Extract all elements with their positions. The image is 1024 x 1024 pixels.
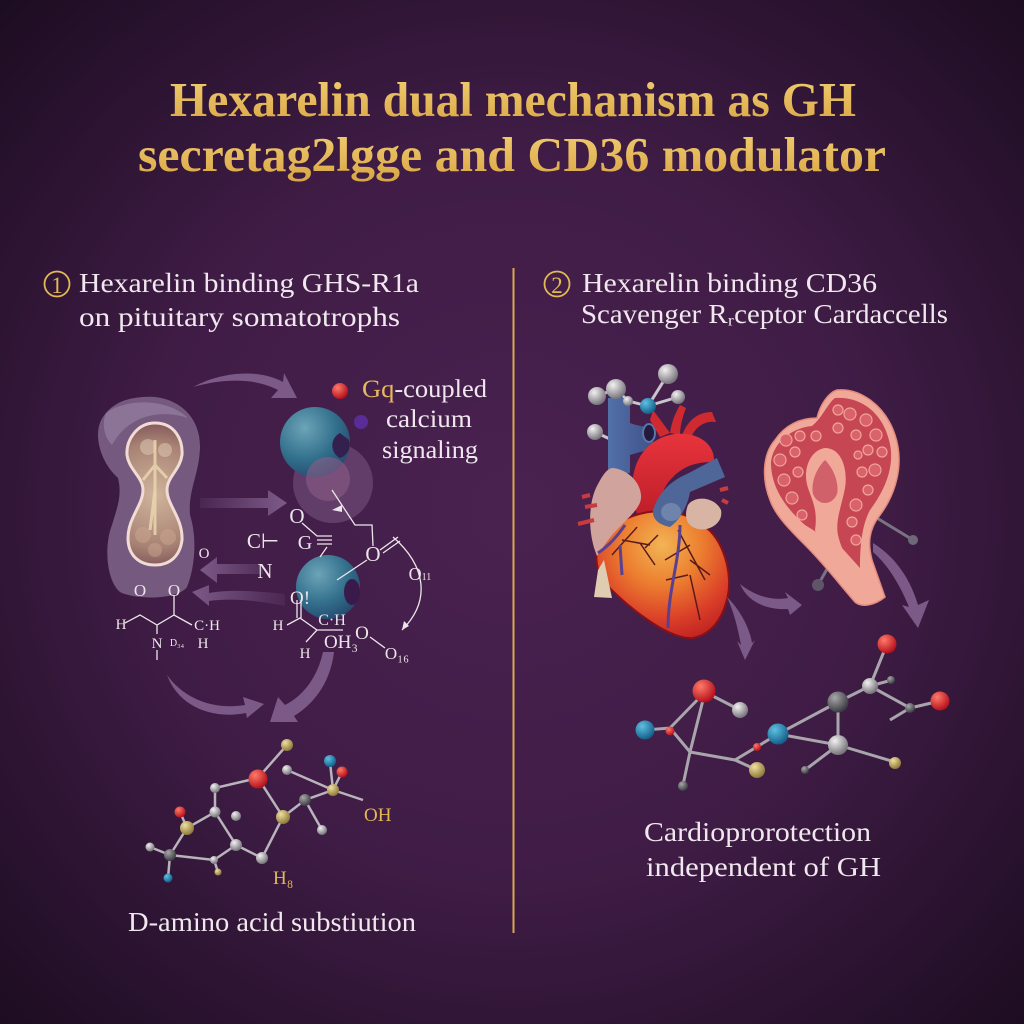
arrows: left pathway [167, 373, 334, 722]
heading: step 2 [544, 268, 948, 329]
molecule: D-amino acid: H₈ [273, 868, 293, 889]
heading: step 2: Hexarelin binding CD36 [582, 268, 877, 298]
chemical structure sketch: OH₃ [324, 632, 358, 653]
gq-coupled signaling label: signaling [382, 437, 479, 464]
chemical structure sketch: O [289, 504, 305, 528]
chemical structure sketch: N [152, 636, 163, 652]
chemical structure sketch [116, 490, 431, 663]
caption: cardioprotection [644, 817, 881, 882]
chemical structure sketch: H [198, 636, 209, 652]
molecule: D-amino acid: OH [364, 805, 392, 826]
chemical structure sketch: N [257, 559, 273, 583]
heading: step 1 [44, 268, 419, 332]
caption: cardioprotection: Cardioprorotection [644, 817, 872, 847]
icon: pituitary cell [98, 397, 200, 597]
chemical structure sketch: O11 [409, 564, 431, 584]
title: secretag2lgge and CD36 modulator [138, 127, 886, 182]
gq-coupled signaling label: Gq-coupled [362, 376, 488, 403]
heading: step 1: on pituitary somatotrophs [79, 302, 400, 332]
arrows: right pathway [727, 543, 929, 660]
chemical structure sketch: O! [290, 588, 310, 609]
chemical structure sketch: H [300, 646, 311, 662]
gq-coupled signaling label: calcium [386, 406, 473, 433]
title [138, 72, 886, 182]
chemical structure sketch: O [365, 542, 381, 566]
chemical structure sketch: O₁₆ [385, 644, 409, 663]
chemical structure sketch: H [273, 618, 284, 634]
molecule: D-amino acid [146, 739, 392, 889]
chemical structure sketch: O [134, 581, 146, 600]
chemical structure sketch: O [355, 623, 369, 644]
chemical structure sketch: H [116, 617, 127, 633]
chemical structure sketch: C·H [194, 618, 220, 634]
icon: receptor spheres [280, 407, 373, 619]
caption: d-amino acid: D-amino acid substiution [128, 907, 417, 937]
icon: cardiac tissue [765, 390, 918, 605]
gq-coupled signaling label [332, 376, 488, 464]
caption: cardioprotection: independent of GH [646, 852, 881, 882]
chemical structure sketch: O [168, 581, 180, 600]
chemical structure sketch: D₃₄ [170, 638, 185, 649]
heading: step 2: 2 [551, 273, 563, 298]
icon: heart [578, 364, 729, 638]
chemical structure sketch: G [298, 532, 312, 554]
heading: step 1: 1 [51, 273, 63, 298]
chemical structure sketch: C·H [318, 612, 346, 629]
chemical structure sketch: O [199, 546, 210, 562]
heading: step 2: Scavenger Rᵣceptor Cardaccells [581, 299, 948, 329]
heading: step 1: Hexarelin binding GHS-R1a [79, 268, 419, 298]
title: Hexarelin dual mechanism as GH [170, 72, 856, 127]
panel: right, cardiac binding [544, 268, 950, 882]
divider [512, 268, 514, 933]
chemical structure sketch: C⊢ [247, 529, 279, 553]
molecule: cardioprotective [636, 634, 950, 791]
panel: left, pituitary binding [44, 268, 488, 937]
